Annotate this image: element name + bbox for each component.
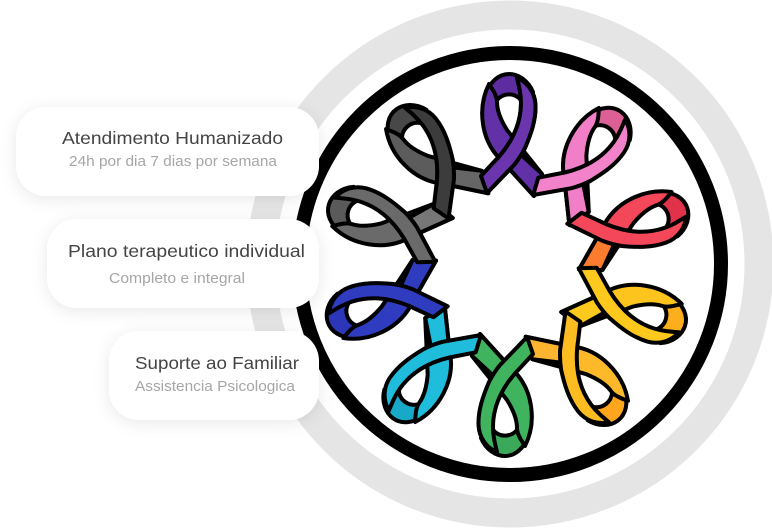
ribbon: yellow (559, 262, 694, 357)
card: Atendimento Humanizado (16, 107, 319, 196)
ribbon: purple front end (481, 78, 536, 193)
ribbon: pink (527, 95, 648, 230)
ribbon: green (472, 334, 533, 456)
card: Plano terapeutico individual: Completo e integral (109, 271, 245, 287)
card: Suporte ao Familiar: Suporte ao Familiar (135, 353, 299, 373)
ribbon: purple (481, 74, 542, 196)
ribbon: gray (320, 173, 455, 268)
ribbon: blue (318, 253, 452, 349)
card: Atendimento Humanizado: Atendimento Humanizado (62, 128, 283, 148)
card: Suporte ao Familiar (109, 331, 319, 420)
card: Plano terapeutico individual (47, 219, 319, 308)
ribbon: gold (519, 306, 640, 440)
card: Suporte ao Familiar: Assistencia Psicologica (135, 379, 296, 395)
ribbon: red (563, 181, 697, 277)
outer grey ring (261, 15, 759, 513)
ribbon: cyan (366, 300, 487, 435)
ribbon: dark gray (374, 90, 495, 224)
black ring (299, 53, 721, 475)
card: Atendimento Humanizado: 24h por dia 7 dias por semana (69, 154, 278, 170)
card: Plano terapeutico individual: Plano terapeutico individual (68, 241, 305, 261)
